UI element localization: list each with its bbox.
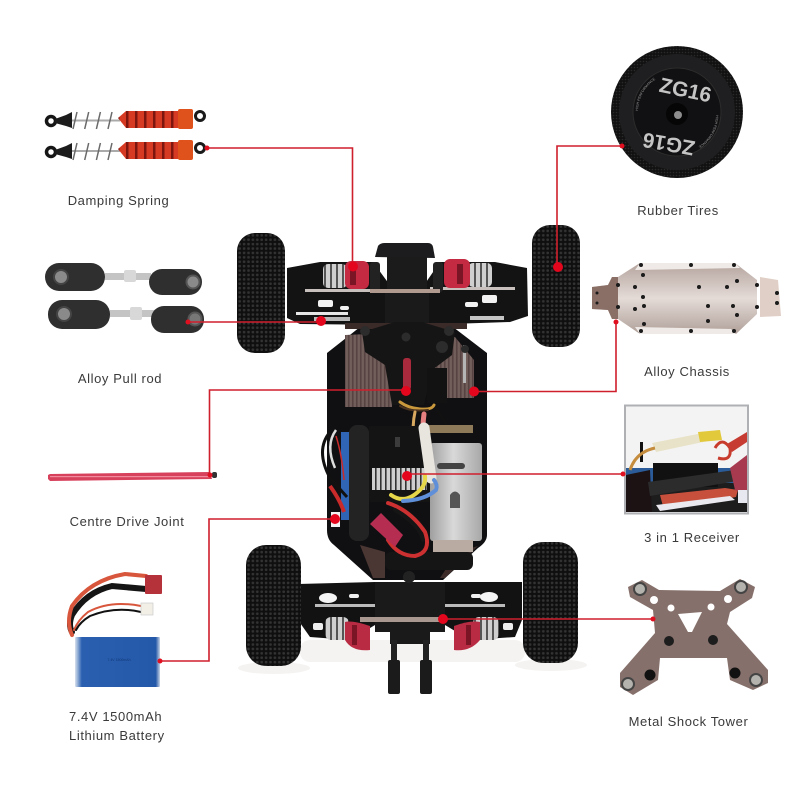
- callout line: alloy chassis: [469, 320, 618, 396]
- label: metal shock tower: Metal Shock Tower: [629, 714, 748, 729]
- rear wheels: [246, 542, 578, 666]
- part: rubber tire: HIGH PERFORMANCE: [698, 115, 718, 148]
- main chassis tub: [327, 323, 487, 580]
- part: rubber tire: HIGH PERFORMANCE: [636, 78, 656, 111]
- front bumper and centre block: [370, 243, 443, 323]
- battery pack: 7.4V 1500mAh: [107, 658, 131, 662]
- label: receiver: 3 in 1 Receiver: [644, 530, 740, 545]
- part: damping spring: [46, 109, 204, 160]
- lower shock absorber: [46, 140, 204, 160]
- callout line: receiver: [402, 471, 626, 481]
- part: centre drive joint: [48, 472, 217, 481]
- part: rubber tire: [611, 46, 743, 178]
- part: metal shock tower: [620, 579, 768, 695]
- callout line: rubber tires: [553, 144, 624, 272]
- part: lithium battery: [69, 574, 162, 687]
- part: rubber tire: ZG16: [641, 128, 697, 159]
- front wheels: [237, 225, 580, 353]
- front shocks: [323, 259, 492, 289]
- T plug: [145, 575, 162, 594]
- part: rubber tire: ZG16: [657, 74, 713, 107]
- part: 3 in 1 receiver photo: [625, 406, 748, 514]
- part: alloy chassis: [592, 263, 781, 334]
- label: battery: Lithium Battery: [69, 728, 165, 743]
- label: rubber tires: Rubber Tires: [637, 203, 719, 218]
- motor: [425, 425, 482, 552]
- ground shadows: [238, 640, 587, 674]
- label: centre drive joint: Centre Drive Joint: [70, 514, 184, 529]
- rear shocks: [325, 617, 499, 650]
- label: battery: 7.4V 1500mAh: [69, 709, 162, 724]
- part: alloy pull rod: [45, 263, 204, 333]
- rear hub: [385, 552, 473, 570]
- rear plate and skid legs: [360, 617, 440, 694]
- callout line: pull rod: [186, 316, 326, 326]
- motor wires and connector: [370, 428, 437, 556]
- servo wires: [400, 402, 452, 442]
- label: alloy pull rod: Alloy Pull rod: [78, 371, 162, 386]
- battery cables in the tub: [322, 430, 351, 527]
- lower pull rod: [48, 300, 204, 333]
- battery wires: [69, 574, 146, 635]
- receiver box and heat sink: [369, 426, 431, 502]
- upper pull rod: [45, 263, 202, 295]
- label: battery: [69, 709, 165, 743]
- callout line: centre drive joint: [208, 386, 411, 478]
- car chassis illustration: [237, 225, 587, 694]
- callout line: shock tower: [438, 614, 656, 624]
- front suspension arms: [287, 262, 528, 325]
- label: alloy chassis: Alloy Chassis: [644, 364, 730, 379]
- callout line: battery: [158, 514, 340, 664]
- foam strap: [349, 425, 369, 541]
- callout line: damping spring: [204, 146, 358, 272]
- rear suspension arms: [298, 571, 522, 640]
- balance plug: [141, 603, 153, 615]
- upper shock absorber: [46, 109, 204, 129]
- steering plate: [360, 322, 469, 405]
- label: damping spring: Damping Spring: [68, 193, 169, 208]
